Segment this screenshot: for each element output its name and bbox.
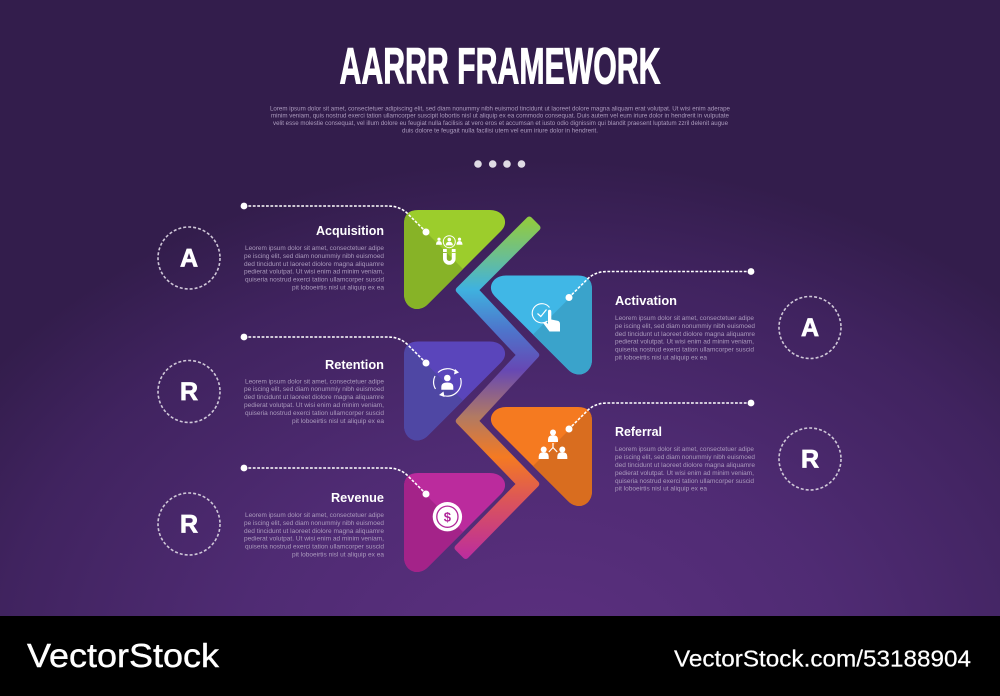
icon: magnet attracting people	[436, 236, 462, 265]
badge: R (referral)	[779, 428, 841, 490]
panel text: referral: Leorem ipsum dolor sit amet, consectetuer adipe	[615, 446, 754, 453]
intro text block: minim veniam, quis nostrud exerci tation ullamcorper suscipit lobortis nisl ut aliquip ex ea commodo consequat. Duis autem vel eum iriure dolor in hendrerit in vulputate	[271, 113, 729, 120]
triangle: revenue	[404, 473, 506, 572]
panel text: activation: Leorem ipsum dolor sit amet, consectetuer adipe	[615, 315, 754, 322]
panel text: revenue: pe iscing elit, sed diam nonummiy nibh euismoed	[244, 520, 384, 527]
connector: revenue	[241, 465, 430, 498]
panel text: revenue: Leorem ipsum dolor sit amet, consectetuer adipe	[245, 512, 384, 519]
panel text: referral: pit loboeirtis nisl ut aliquip ex ea	[615, 486, 707, 493]
zigzag band	[458, 220, 538, 556]
icon: dollar coin: $	[444, 509, 452, 524]
intro text block: Lorem ipsum dolor sit amet, consectetuer adipiscing elit, sed diam nonummy nibh euismod tincidunt ut laoreet dolore magna aliquam erat volutpat. Ut wisi enim aderape	[270, 105, 730, 112]
panel text: acquisition: Leorem ipsum dolor sit amet, consectetuer adipe	[245, 245, 384, 252]
panel text: activation: ded tincidunt ut laoreet diolore magna aliquamre	[615, 331, 755, 338]
panel text: activation: Activation	[615, 294, 677, 308]
panel text: referral: pe iscing elit, sed diam nonummiy nibh euismoed	[615, 454, 755, 461]
intro text block	[270, 105, 730, 135]
panel text: acquisition: quiseria nostrud exerci tation ullamcorper suscid	[245, 277, 384, 284]
badge: A (activation)	[779, 296, 841, 358]
triangle: referral	[490, 407, 592, 506]
connector: activation	[566, 268, 754, 301]
panel text: retention: pit loboeirtis nisl ut aliquip ex ea	[292, 418, 384, 425]
panel text: acquisition: pe iscing elit, sed diam nonummiy nibh euismoed	[244, 253, 384, 260]
badge: A (activation): A	[801, 314, 819, 342]
badge: R (retention)	[158, 360, 220, 422]
connector: retention	[241, 334, 430, 366]
connector: acquisition	[241, 203, 430, 236]
panel text: activation: pit loboeirtis nisl ut aliquip ex ea	[615, 354, 707, 362]
panel text: retention: ded tincidunt ut laoreet diolore magna aliquamre	[244, 394, 384, 401]
intro text block: duis dolore te feugait nulla facilisi utem vel eum iriure dolor in hendrerit.	[402, 128, 598, 135]
panel text: referral: pedierat volutpat. Ut wisi enim ad minim veniam,	[615, 470, 754, 477]
title: AARRR FRAMEWORK	[340, 37, 661, 94]
panel text: referral	[615, 425, 755, 493]
badge: A (acquisition)	[158, 227, 220, 289]
footer bar	[0, 616, 1000, 696]
intro text block: velit esse molestie consequat, vel illum dolore eu feugiat nulla facilisis at vero eros et accumsan et iusto odio dignissim qui blandit praesent luptatum zzril delenit augue	[273, 120, 728, 127]
panel text: retention: quiseria nostrud exerci tation ullamcorper suscid	[245, 410, 384, 417]
panel text: revenue: pit loboeirtis nisl ut aliquip ex ea	[292, 552, 384, 558]
icon: dollar coin	[433, 502, 462, 531]
panel text: acquisition: pedierat volutpat. Ut wisi enim ad minim veniam,	[244, 269, 384, 276]
badge: R (referral): R	[801, 446, 819, 474]
icon: check and pointing hand	[532, 304, 560, 332]
panel text: revenue: ded tincidunt ut laoreet diolore magna aliquamre	[244, 528, 384, 535]
panel text: retention: pe iscing elit, sed diam nonummiy nibh euismoed	[244, 386, 384, 393]
icon: cycle with person	[434, 369, 461, 397]
panel text: acquisition: Acquisition	[316, 224, 384, 238]
pagination dots	[474, 160, 525, 168]
panel text: revenue	[244, 491, 384, 558]
panel text: acquisition: pit loboeirtis nisl ut aliquip ex ea	[292, 284, 384, 292]
triangle: activation	[490, 276, 592, 374]
panel text: activation	[615, 294, 755, 362]
panel text: acquisition: ded tincidunt ut laoreet diolore magna aliquamre	[244, 261, 384, 268]
triangle: acquisition	[404, 210, 506, 309]
panel text: revenue: Revenue	[331, 491, 384, 505]
badge: R (revenue)	[158, 493, 220, 555]
triangle: retention	[404, 342, 505, 440]
panel text: activation: quiseria nostrud exerci tation ullamcorper suscid	[615, 347, 754, 354]
panel text: revenue: quiseria nostrud exerci tation ullamcorper suscid	[245, 544, 384, 551]
panel text: referral: ded tincidunt ut laoreet diolore magna aliquamre	[615, 462, 755, 469]
panel text: retention	[244, 358, 384, 425]
badge: R (revenue): R	[180, 510, 198, 538]
panel text: acquisition	[244, 224, 384, 292]
footer logo wordmark: VectorStock	[27, 637, 220, 674]
connector: referral	[566, 400, 754, 432]
panel text: activation: pedierat volutpat. Ut wisi enim ad minim veniam,	[615, 339, 754, 346]
panel text: referral: quiseria nostrud exerci tation ullamcorper suscid	[615, 478, 754, 485]
icon: referral network of people	[539, 430, 567, 459]
badge: A (acquisition): A	[180, 244, 198, 272]
panel text: retention: Leorem ipsum dolor sit amet, consectetuer adipe	[245, 378, 384, 385]
panel text: referral: Referral	[615, 425, 662, 439]
panel text: revenue: pedierat volutpat. Ut wisi enim ad minim veniam,	[244, 536, 384, 543]
panel text: retention: pedierat volutpat. Ut wisi enim ad minim veniam,	[244, 402, 384, 409]
footer image id: VectorStock.com/53188904	[674, 646, 971, 672]
panel text: retention: Retention	[325, 358, 384, 372]
badge: R (retention): R	[180, 378, 198, 406]
panel text: activation: pe iscing elit, sed diam nonummiy nibh euismoed	[615, 323, 755, 330]
